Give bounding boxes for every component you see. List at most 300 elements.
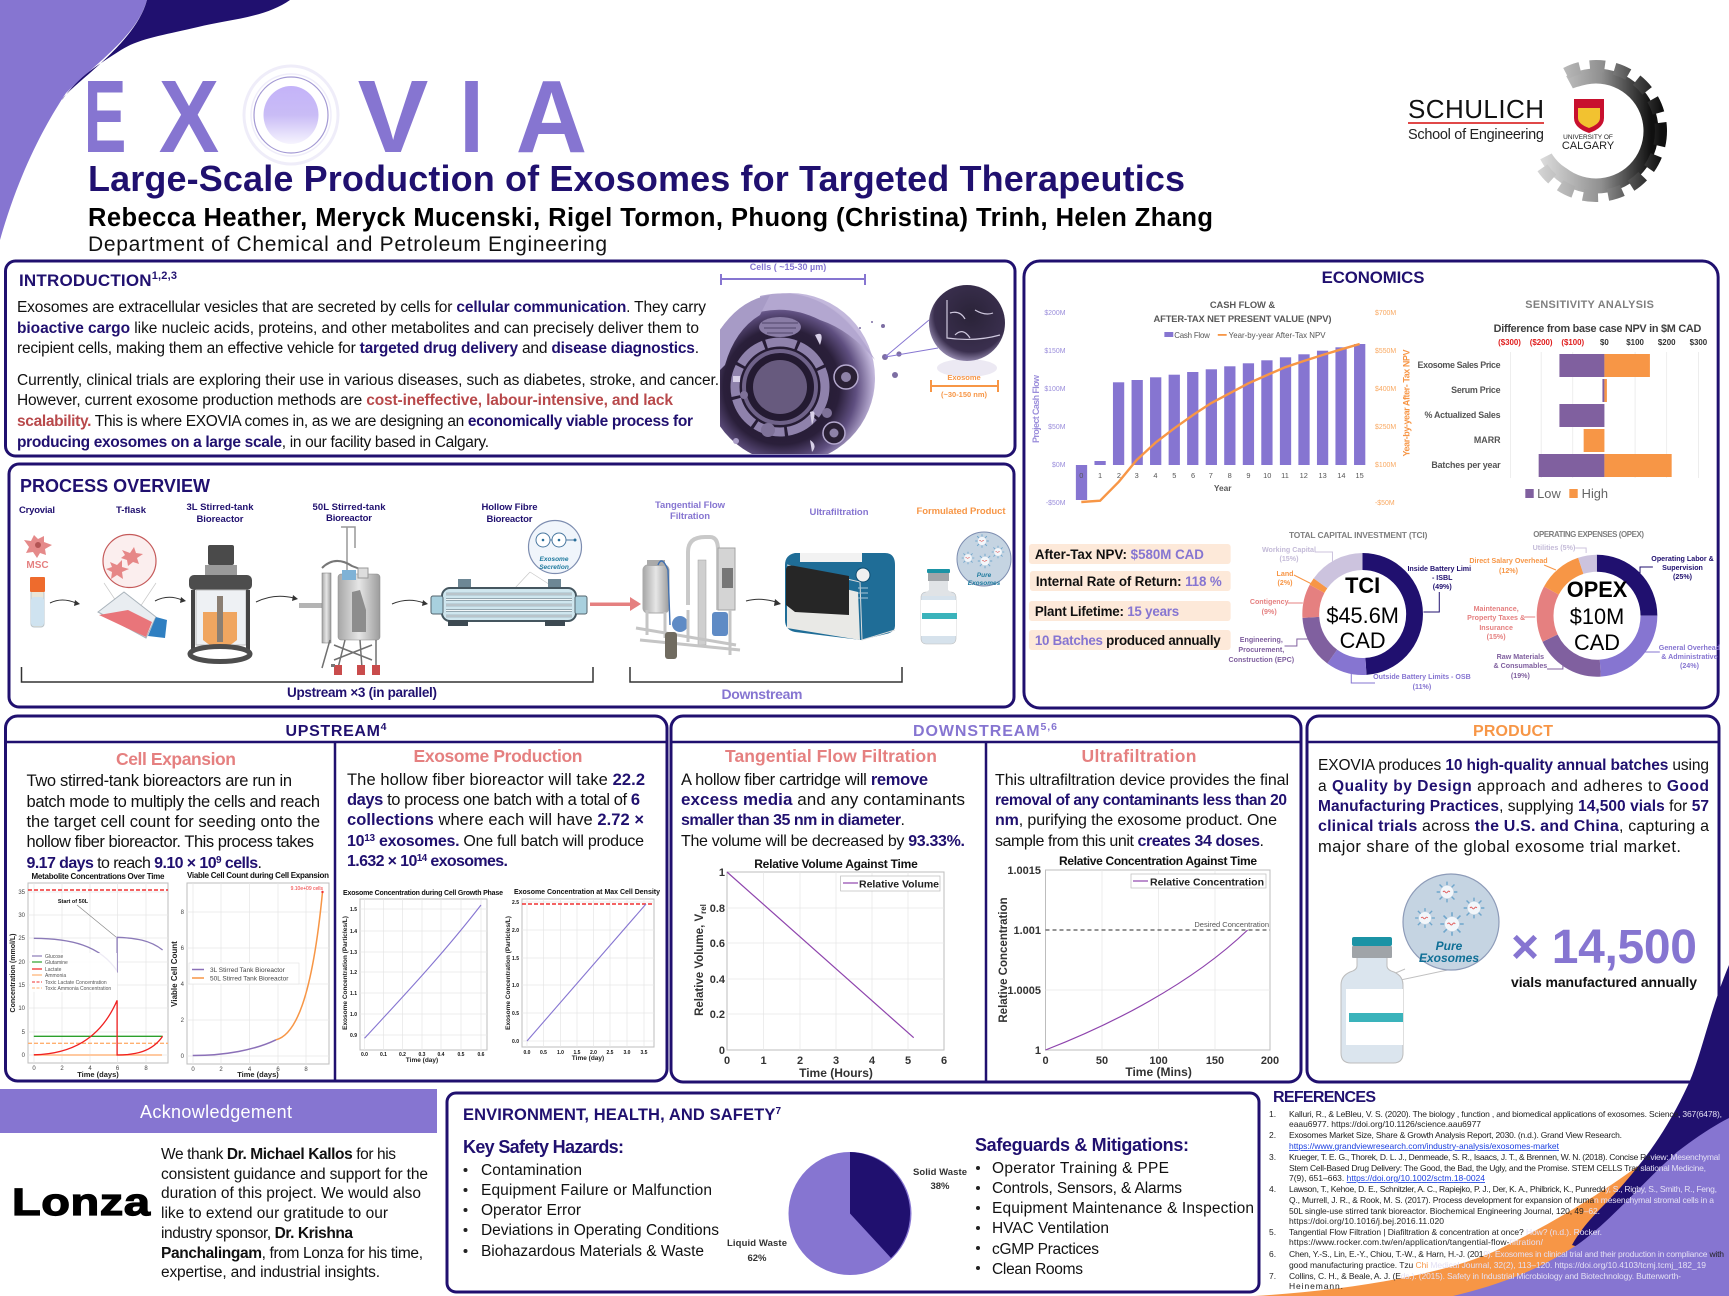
chart legend <box>841 876 940 891</box>
label: 3L bioreactor <box>186 502 254 525</box>
text: exosome production: 1.632 × 10 <box>347 853 508 870</box>
bracket: upstream <box>22 667 593 682</box>
label: cryovial: Cryovial <box>19 505 55 516</box>
label: tangential flow filtration: Tangential Flow <box>655 500 726 511</box>
reference list: 1. <box>1269 1109 1276 1119</box>
text: acknowledgement: like to extend our gratitude to our <box>161 1205 388 1222</box>
chart: exosome concentration max density: Exosome Concentration at Max Cell Density <box>514 889 660 896</box>
tick labels: 0 <box>32 1066 36 1072</box>
donut center text: $10M <box>1570 604 1624 629</box>
panel: introduction <box>6 261 1015 463</box>
tick labels: 2 <box>797 1055 803 1067</box>
donut center text <box>1326 573 1399 653</box>
list: safeguards and mitigations: Clean Rooms <box>992 1261 1083 1278</box>
text: exosome production <box>347 771 645 870</box>
tick labels: 0.5 <box>512 1011 519 1017</box>
gear graphic <box>1531 66 1661 196</box>
stat: after-tax NPV <box>1029 544 1231 564</box>
donut labels: Inside Battery Limi <box>1407 565 1471 573</box>
left axis ticks: $50M <box>1048 424 1066 431</box>
tick labels: 0.8 <box>710 903 725 915</box>
tick labels: 0 <box>1042 1055 1049 1067</box>
tick labels <box>350 907 485 1058</box>
panel: downstream <box>671 716 1301 1082</box>
donut center text: OPEX <box>1567 577 1628 602</box>
tick labels: 0.5 <box>458 1052 465 1058</box>
decorative swoosh: top left <box>0 0 290 240</box>
panel: acknowledgement <box>0 1089 437 1281</box>
donut labels: (19%) <box>1511 672 1530 680</box>
text: product description: a Quality by Design approach and adheres to Good <box>1318 778 1709 795</box>
tick labels: 1 <box>1035 1045 1041 1057</box>
arrow: flask to 3L <box>155 597 186 603</box>
tick labels: 5 <box>905 1055 911 1067</box>
text: product description: Manufacturing Practices, supplying 14,500 vials for 57 <box>1318 798 1709 815</box>
text: clinical need: Currently, clinical trials are exploring their use in various diseases, such as diabetes, stroke, and cancer. <box>17 372 719 389</box>
text: exosome description: recipient cells, making them an effective vehicle for targeted drug delivery and disease diagnostics. <box>17 340 699 357</box>
x-axis labels: 0 <box>1079 471 1083 480</box>
x-axis labels: 14 <box>1337 471 1346 480</box>
tick labels: 100 <box>1149 1055 1168 1067</box>
logo wordmark: SCHULICH <box>1408 94 1544 124</box>
bracket: downstream <box>630 667 902 682</box>
list: key safety hazards <box>463 1137 719 1260</box>
list: key safety hazards: Operator Error <box>481 1202 581 1219</box>
low bars <box>1539 354 1604 477</box>
right axis ticks <box>1375 310 1396 507</box>
x-axis labels: 1 <box>1098 471 1102 480</box>
heading: economics: ECONOMICS <box>1322 268 1424 287</box>
text: cell expansion <box>26 772 320 872</box>
letter I: I <box>459 59 484 175</box>
bars: cash flow <box>1076 344 1365 500</box>
tick labels: 1.2 <box>350 970 357 976</box>
text: clinical need: producing exosomes on a large scale, in our facility based in Calgary. <box>17 434 489 451</box>
donut labels: Insurance <box>1479 624 1513 632</box>
donut center text: $45.6M <box>1326 603 1399 628</box>
x-axis labels: 10 <box>1263 471 1271 480</box>
tick labels: 1.0005 <box>1007 985 1041 997</box>
text: clinical need: scalability. This is where EXOVIA comes in, as we are designing an economically viable process for <box>17 413 693 430</box>
left axis ticks: $150M <box>1044 348 1066 355</box>
chart: relative concentration: Desired Concentration <box>1194 920 1269 929</box>
sensitivity ticks: $200 <box>1658 338 1676 347</box>
donut labels: (12%) <box>1499 567 1519 575</box>
sensitivity category labels: % Actualized Sales <box>1424 410 1501 420</box>
chart legend: metabolites: Toxic Lactate Concentration <box>45 980 107 986</box>
donut labels <box>1467 544 1720 680</box>
tick labels: 0.3 <box>419 1052 426 1058</box>
reference list: https://www.rocker.com.tw/en/application/tangential-flow-filtration/ <box>1289 1237 1544 1247</box>
x-axis labels: 8 <box>1228 471 1232 480</box>
heading: introduction: 1,2,3 <box>152 270 177 282</box>
tick labels: 35 <box>18 890 26 896</box>
reference list: Heinemann. <box>1289 1281 1343 1291</box>
x-axis labels: 15 <box>1356 471 1364 480</box>
text: ultrafiltration: removal of any contaminants less than 20 <box>995 792 1287 809</box>
label: hollow fibre bioreactor: Hollow Fibre <box>482 502 538 513</box>
donut center text: TCI <box>1345 573 1380 598</box>
tick labels: 30 <box>18 913 26 919</box>
tick labels: 1 <box>719 867 725 879</box>
text: TFF <box>681 771 965 850</box>
text: product description: clinical trials across the U.S. and China, capturing a <box>1318 818 1709 835</box>
reference list: Tangential Flow Filtration | Diafiltration & concentration at once? How? (n.d.). Rocker. <box>1289 1227 1602 1237</box>
donut labels: (9%) <box>1262 608 1277 616</box>
tick labels: 15 <box>18 983 26 989</box>
x-axis labels: 6 <box>1191 471 1195 480</box>
callout: exosome secretion: Exosome <box>540 556 569 563</box>
arrow: TFF to ultrafiltration <box>746 599 781 606</box>
column: exosome production: Exosome Production <box>414 746 582 766</box>
heading: EHS: 7 <box>775 1106 781 1117</box>
left axis ticks: -$50M <box>1046 500 1066 507</box>
list: key safety hazards: Deviations in Operating Conditions <box>481 1222 719 1239</box>
tick labels: 4 <box>88 1066 92 1072</box>
donut labels: Direct Salary Overhead <box>1469 557 1548 565</box>
chart legend: metabolites: Toxic Ammonia Concentration <box>45 986 111 992</box>
tick labels: 1.0015 <box>1007 865 1041 877</box>
donut labels: Construction (EPC) <box>1228 656 1295 664</box>
list: safeguards and mitigations: HVAC Ventilation <box>992 1220 1109 1237</box>
tick labels: 1.0 <box>557 1050 564 1056</box>
tick labels: 6 <box>276 1067 280 1073</box>
chart legend: metabolites: Lactate <box>45 967 62 973</box>
donut ring <box>1311 562 1415 666</box>
icon: MSC and cryovial <box>24 535 52 627</box>
x-axis labels: 12 <box>1300 471 1308 480</box>
x-axis labels: Year <box>1214 483 1232 493</box>
tick labels: 150 <box>1206 1055 1224 1067</box>
chart legend: metabolites: Glucose <box>45 954 64 960</box>
chart legend: Year-by-year After-Tax NPV <box>1229 331 1326 340</box>
high bars <box>1584 354 1672 477</box>
text: cell expansion: 9 <box>216 855 222 866</box>
reference list: Collins, C. H., & Beale, A. J. (Eds.). (2015). Safety in Industrial Microbiology and Biotechnology. Butterworth- <box>1289 1271 1681 1281</box>
chart: cash flow and NPV <box>1031 300 1412 507</box>
tick labels: 0.6 <box>478 1052 485 1058</box>
label: ultrafiltration: Ultrafiltration <box>810 507 869 518</box>
x-axis labels <box>1079 471 1364 493</box>
reference list: 5. <box>1269 1227 1276 1237</box>
donut labels: Outside Battery Limits - OSB <box>1373 673 1471 681</box>
chart: exosome concentration max density: Time (day) <box>572 1055 604 1062</box>
chart: metabolite concentrations <box>10 872 168 1079</box>
sensitivity ticks: ($100) <box>1561 338 1585 347</box>
chart: relative concentration <box>998 854 1279 1079</box>
sensitivity ticks: $100 <box>1626 338 1644 347</box>
sensitivity ticks: ($300) <box>1498 338 1521 347</box>
right axis ticks: $100M <box>1375 462 1396 469</box>
text: exosome production: One full batch will produce <box>463 833 644 850</box>
tick labels: 0.9 <box>350 1033 357 1039</box>
sensitivity legend: High <box>1582 486 1608 501</box>
text: exosome production: days to process one batch with a total of 6 <box>347 791 640 809</box>
tick labels: 0 <box>22 1053 26 1059</box>
icon: vial with pure exosomes callout <box>921 532 1011 644</box>
chart: waste pie: Liquid Waste <box>727 1238 787 1249</box>
chart: metabolite concentrations: Time (days) <box>77 1070 119 1079</box>
letter X: X <box>159 59 219 174</box>
axis titles: Relative Concentration <box>998 897 1010 1023</box>
icon: T-flask with cell callout <box>98 534 167 638</box>
letter E: E <box>84 59 126 175</box>
axis titles: Concentration (mmol/L) <box>10 934 17 1012</box>
tick labels: 4 <box>181 982 185 988</box>
authors: Rebecca Heather, Meryck Mucenski, Rigel Tormon, Phuong (Christina) Trinh, Helen Zhang <box>88 204 1213 232</box>
arrow: cryovial to flask <box>50 600 80 606</box>
chart: viable cell count: Viable Cell Count during Cell Expansion <box>187 871 329 880</box>
sensitivity category labels <box>1418 360 1501 470</box>
chart: relative concentration: Relative Concentration Against Time <box>1059 854 1257 868</box>
heading: process overview: PROCESS OVERVIEW <box>20 476 210 496</box>
reference list: 4. <box>1269 1184 1276 1194</box>
tick labels: 4 <box>869 1055 876 1067</box>
department: Department of Chemical and Petroleum Engineering <box>88 233 607 256</box>
donut labels: Property Taxes & <box>1467 614 1525 622</box>
dimension: cell size <box>721 262 865 285</box>
sensitivity category labels: Exosome Sales Price <box>1418 360 1501 370</box>
tick labels: 3 <box>833 1055 839 1067</box>
heading: downstream: 5,6 <box>1041 721 1057 733</box>
label: 3L bioreactor: Bioreactor <box>196 514 244 525</box>
icon: vial with pure exosomes: Pure <box>1436 939 1463 953</box>
tick labels: 0.6 <box>710 938 725 950</box>
text: clinical need: However, current exosome production methods are cost-ineffective, labour-intensive, and lack <box>17 392 673 409</box>
text: ultrafiltration <box>995 772 1289 850</box>
list: safeguards and mitigations: Operator Training & PPE <box>992 1160 1169 1177</box>
donut labels: Working Capital <box>1262 546 1316 554</box>
sensitivity category labels: Batches per year <box>1431 460 1501 470</box>
text: ultrafiltration: This ultrafiltration device provides the final <box>995 772 1289 789</box>
label: hollow fibre bioreactor <box>482 502 538 525</box>
arrow: 3L to 50L <box>256 595 298 602</box>
tick labels <box>1007 865 1279 1067</box>
list: safeguards and mitigations: cGMP Practices <box>992 1241 1099 1258</box>
heading: introduction: INTRODUCTION <box>19 271 152 290</box>
list: key safety hazards: Equipment Failure or Malfunction <box>481 1182 712 1199</box>
chart: TCI donut <box>1228 530 1471 691</box>
donut labels: (15%) <box>1487 633 1506 641</box>
banner: acknowledgement: Acknowledgement <box>140 1102 292 1122</box>
donut labels: (25%) <box>1673 573 1693 581</box>
annotation: start of 50L <box>58 899 116 937</box>
chart: metabolite concentrations: Metabolite Concentrations Over Time <box>32 872 165 881</box>
icon: orb forming letter O <box>244 66 338 164</box>
reference list: Lawson, T., Kehoe, D. E., Schnitzler, A. C., Rapiejko, P. J., Der, K. A., Philbrick, K., Punreddy, S., Rigby, S., Smith, R., Feng, <box>1289 1184 1717 1194</box>
text: clinical need <box>17 372 719 451</box>
right axis ticks: $550M <box>1375 348 1396 355</box>
text: TFF: smaller than 35 nm in diameter. <box>681 812 905 829</box>
right axis ticks: $700M <box>1375 310 1396 317</box>
donut labels: & Administrative <box>1661 653 1718 661</box>
annotation: start of 50L: Start of 50L <box>58 899 89 905</box>
illustration: cell and exosome <box>705 262 1005 463</box>
logo: Lonza: Lonza <box>12 1181 150 1224</box>
chart: sensitivity analysis: Difference from base case NPV in $M CAD <box>1494 323 1701 335</box>
chart legend: Relative Concentration <box>1150 876 1264 888</box>
x-axis labels: 9 <box>1246 471 1250 480</box>
chart: exosome concentration growth phase: Time (day) <box>406 1057 438 1064</box>
callout: exosome secretion: Secretion <box>539 564 569 571</box>
tick labels: 50 <box>1096 1055 1108 1067</box>
chart: relative volume <box>694 857 947 1080</box>
stat: batches <box>1029 630 1231 650</box>
tick labels <box>181 910 308 1073</box>
stat caption: vials manufactured annually <box>1511 974 1697 990</box>
tick labels: 1.0 <box>350 1012 357 1018</box>
tick labels: 1.001 <box>1013 925 1041 937</box>
university crest <box>1574 99 1604 133</box>
reference list: https://www.grandviewresearch.com/industry-analysis/exosomes-market <box>1289 1141 1560 1151</box>
title: Large-Scale Production of Exosomes for Targeted Therapeutics <box>88 158 1185 199</box>
tick labels: 2.5 <box>512 900 519 906</box>
tick labels: 6 <box>941 1055 947 1067</box>
reference list: https://doi.org/10.1016/j.bej.2016.11.020 <box>1289 1216 1444 1226</box>
donut labels: Contigency <box>1250 598 1289 606</box>
icon: 50L stirred-tank bioreactor <box>299 527 380 675</box>
donut labels: Supervision <box>1662 564 1703 572</box>
axis titles: Viable Cell Count <box>170 941 179 1007</box>
chart: OPEX donut: OPERATING EXPENSES (OPEX) <box>1533 530 1644 539</box>
stat: plant lifetime: Plant Lifetime: 15 years <box>1035 604 1179 619</box>
text: exosome production: exosomes. <box>427 853 508 870</box>
sensitivity category labels: Serum Price <box>1451 385 1501 395</box>
axis title: NPV: Year-by-year After- Tax NPV <box>1402 349 1412 456</box>
tick labels: 0.5 <box>540 1050 547 1056</box>
x-axis labels: 3 <box>1135 471 1139 480</box>
reference list: Chen, Y.-S., Lin, E.-Y., Chiou, T.-W., & Harn, H.-J. (2019). Exosomes in clinical trial and their production in compliance with <box>1289 1249 1724 1259</box>
donut labels: & Consumables <box>1493 662 1547 670</box>
tick labels: 1.0 <box>512 983 519 989</box>
donut center text <box>1567 577 1628 655</box>
chart: waste pie: 62% <box>747 1253 767 1264</box>
sensitivity ticks: $300 <box>1690 338 1708 347</box>
label: upstream: Upstream ×3 (in parallel) <box>287 685 437 700</box>
text: exosome production: collections where each will have 2.72 × <box>347 811 644 829</box>
logo: Schulich School of Engineering, University of Calgary: CALGARY <box>1562 140 1615 152</box>
reference list: 7(9), 651–663. https://doi.org/10.1002/sctm.18-0024 <box>1289 1173 1485 1183</box>
x-axis labels: 2 <box>1117 471 1121 480</box>
panel: references <box>1269 1089 1724 1291</box>
icon: ultrafiltration device <box>785 553 895 640</box>
donut labels: (11%) <box>1413 683 1432 691</box>
donut labels: General Overhead <box>1659 644 1720 652</box>
chart legend: metabolites: Glutamine <box>45 960 68 966</box>
text: exosome production: exosomes. <box>375 833 460 850</box>
panel: environment, health and safety <box>447 1093 1259 1292</box>
reference list: Q., Murrell, J. R., & Rook, M. S. (2017). Process development for expansion of human mesenchymal stromal cells in a <box>1289 1195 1714 1205</box>
tick labels: 0.4 <box>438 1052 445 1058</box>
donut labels: Engineering, <box>1240 636 1283 644</box>
column: ultrafiltration: Ultrafiltration <box>1082 746 1196 766</box>
donut labels: Operating Labor & <box>1651 555 1714 563</box>
tick labels: 0.0 <box>512 1039 519 1045</box>
icon: cell <box>720 293 875 454</box>
label: 50L bioreactor <box>312 502 386 524</box>
panel: economics <box>1024 261 1720 708</box>
text: exosome production: 10 <box>347 833 460 850</box>
column: exosome production <box>342 746 660 1064</box>
left axis ticks: $100M <box>1044 386 1066 393</box>
stat: batches: 10 Batches produced annually <box>1035 633 1221 648</box>
chart legend: bioreactors: 3L Stirred Tank Bioreactor <box>210 967 286 974</box>
tick labels: 0 <box>719 1045 725 1057</box>
tick labels: 20 <box>18 960 26 966</box>
reference list: 2. <box>1269 1130 1276 1140</box>
stat: vials count: × 14,500 <box>1511 921 1697 974</box>
text: acknowledgement: expertise, and industrial insights. <box>161 1264 380 1281</box>
column: tangential flow filtration: Tangential Flow Filtration <box>725 746 937 766</box>
donut labels: (2%) <box>1278 579 1293 587</box>
chart: exosome concentration max density <box>505 889 660 1062</box>
chart: viable cell count: Time (days) <box>237 1070 279 1079</box>
chart: sensitivity analysis: SENSITIVITY ANALYSIS <box>1525 299 1654 311</box>
right axis ticks: -$50M <box>1375 500 1395 507</box>
dimension: cell size: Cells ( ~15-30 µm) <box>750 262 826 272</box>
label: T-flask: T-flask <box>116 505 147 516</box>
chart: OPEX donut <box>1467 530 1720 680</box>
x-axis labels: 13 <box>1318 471 1327 480</box>
text: product description <box>1318 757 1709 856</box>
axis titles: Exosome Concentration (Particles/L) <box>342 916 349 1030</box>
donut ring <box>1545 563 1649 668</box>
reference list: Krueger, T. E. G., Thorek, D. L. J., Denmeade, S. R., Isaacs, J. T., & Brennen, W. N. (2018). Concise Review: Mesenchymal <box>1289 1152 1720 1162</box>
tick labels: 2 <box>219 1067 223 1073</box>
tick labels: 8 <box>144 1066 148 1072</box>
tick labels: 1.3 <box>350 950 357 956</box>
tick labels: 1.1 <box>350 991 357 997</box>
donut labels: Land <box>1277 570 1294 578</box>
donut labels: (15%) <box>1279 555 1299 563</box>
tick labels: 1.5 <box>574 1050 581 1056</box>
label: tangential flow filtration: Filtration <box>670 511 710 522</box>
tick labels: 0.2 <box>710 1009 725 1021</box>
text: cell expansion: hollow fiber bioreactor. This process takes <box>26 833 314 851</box>
chart legend: metabolites <box>30 953 117 992</box>
chart: TCI donut: TOTAL CAPITAL INVESTMENT (TCI) <box>1289 530 1428 540</box>
list: key safety hazards: Biohazardous Materials & Waste <box>481 1243 704 1260</box>
chart: exosome concentration growth phase <box>342 890 503 1064</box>
label: 50L bioreactor: Bioreactor <box>326 513 372 524</box>
reference list: Exosomes Market Size, Share & Growth Analysis Report, 2030. (n.d.). Grand View Research. <box>1289 1130 1622 1140</box>
text: acknowledgement: duration of this project. We would also <box>161 1185 421 1202</box>
chart: waste pie <box>727 1152 967 1275</box>
decorative swoosh: bottom right <box>1255 965 1729 1296</box>
tick labels: 6 <box>181 946 185 952</box>
tick labels: 0.0 <box>361 1052 368 1058</box>
tick labels: 3.0 <box>624 1050 631 1056</box>
heading: references: REFERENCES <box>1273 1089 1376 1106</box>
stat: internal rate of return: Internal Rate of Return: 118 % <box>1036 574 1222 589</box>
tick labels: 2 <box>60 1066 64 1072</box>
list: safeguards and mitigations: Equipment Maintenance & Inspection <box>992 1200 1254 1217</box>
right axis ticks: $250M <box>1375 424 1396 431</box>
text: acknowledgement: consistent guidance and support for the <box>161 1166 428 1183</box>
left axis ticks <box>1044 310 1066 507</box>
letter A: A <box>516 60 587 174</box>
dimension: exosome size: Exosome <box>947 373 981 382</box>
lines: metabolites <box>28 890 168 1055</box>
stat: plant lifetime <box>1029 601 1231 621</box>
reference list: 50L single-use stirred tank bioreactor. Biochemical Engineering Journal, 120, 49–62. <box>1289 1206 1600 1216</box>
list: safeguards and mitigations: Safeguards & Mitigations: <box>975 1135 1189 1155</box>
arrow: 50L to hollow fibre <box>392 600 428 606</box>
text: cell expansion: . <box>258 855 262 872</box>
tick labels: 0 <box>181 1054 185 1060</box>
tick labels: 0 <box>724 1055 730 1067</box>
stat: after-tax NPV: After-Tax NPV: $580M CAD <box>1035 547 1204 562</box>
